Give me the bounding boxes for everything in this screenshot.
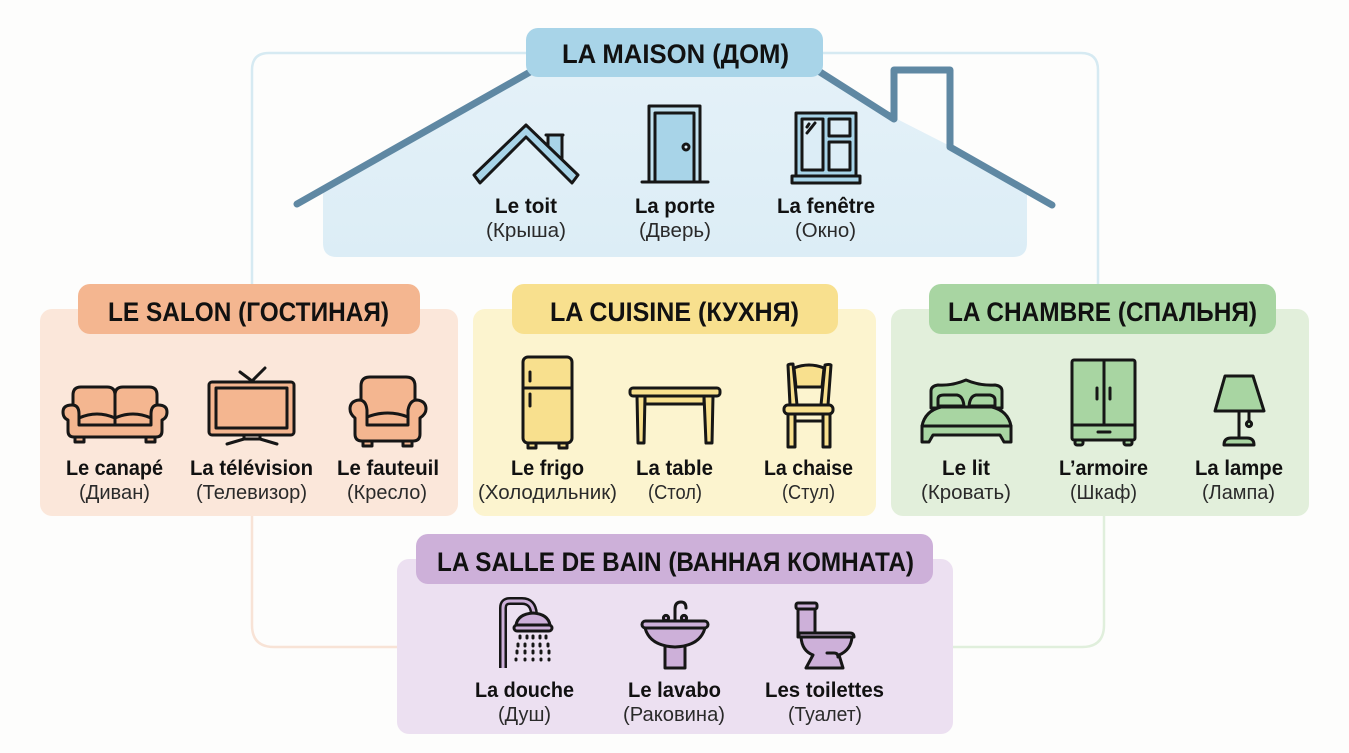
label: la porte [635, 194, 715, 242]
heading: la maison: LA MAISON (ДОМ) [562, 39, 789, 69]
label: les toilettes [765, 678, 884, 726]
icon: door [642, 106, 708, 182]
label: le canapé: Le canapé [66, 456, 163, 480]
icon: lamp [1215, 376, 1264, 445]
roof outline with chimney [297, 70, 1052, 205]
panel: la maison [297, 28, 1052, 257]
house frame outline [252, 53, 1104, 647]
label: la table: La table [636, 456, 713, 480]
label: l'armoire: L’armoire [1059, 456, 1148, 480]
label: le toit [486, 194, 566, 242]
label: le frigo [478, 456, 617, 504]
label: le canapé [66, 456, 163, 504]
label: le frigo: Le frigo [511, 456, 584, 480]
icon: bed [922, 380, 1011, 442]
icon: fridge [523, 357, 572, 448]
label: le canapé: (Диван) [79, 482, 150, 504]
icon: sink [642, 602, 708, 668]
label: la télévision: (Телевизор) [196, 482, 307, 504]
label: la lampe: (Лампа) [1202, 482, 1275, 504]
label: le lavabo [623, 678, 725, 726]
label: le lit: Le lit [942, 456, 990, 480]
label: la fenêtre [777, 194, 875, 242]
panel: la chambre [891, 284, 1309, 516]
label: le fauteuil: (Кресло) [347, 482, 427, 504]
icon: window [792, 113, 860, 183]
label: le lavabo: (Раковина) [623, 704, 725, 726]
heading: la salle de bain [416, 534, 933, 584]
icon: armchair [350, 377, 426, 446]
label: le lit [921, 456, 1011, 504]
label: le fauteuil [337, 456, 439, 504]
label: le lit: (Кровать) [921, 482, 1011, 504]
icon: chair [784, 364, 833, 447]
panel: la salle de bain [397, 534, 953, 734]
label: la table: (Стол) [648, 482, 702, 504]
icon: sofa [63, 387, 167, 442]
label: la chaise: La chaise [764, 456, 853, 480]
label: la fenêtre: La fenêtre [777, 194, 875, 218]
label: le toit: Le toit [495, 194, 557, 218]
heading: la salle de bain: LA SALLE DE BAIN (ВАННАЯ КОМНАТА) [437, 547, 914, 577]
label: le toit: (Крыша) [486, 220, 566, 242]
label: l'armoire: (Шкаф) [1070, 482, 1137, 504]
label: la lampe [1195, 456, 1283, 504]
heading: la chambre [929, 284, 1276, 334]
icon: wardrobe [1072, 360, 1135, 445]
label: la douche: La douche [475, 678, 574, 702]
label: la table [636, 456, 713, 504]
icon: television [209, 368, 294, 444]
label: la douche [475, 678, 574, 726]
panel: la cuisine [473, 284, 876, 516]
label: la lampe: La lampe [1195, 456, 1283, 480]
panel: le salon [40, 284, 458, 516]
heading: le salon: LE SALON (ГОСТИНАЯ) [108, 297, 389, 327]
icon: table [630, 388, 720, 443]
icon: shower [503, 601, 552, 668]
label: les toilettes: (Туалет) [788, 704, 862, 726]
label: la porte: La porte [635, 194, 715, 218]
label: le fauteuil: Le fauteuil [337, 456, 439, 480]
label: la chaise [764, 456, 853, 504]
heading: la chambre: LA CHAMBRE (СПАЛЬНЯ) [948, 297, 1257, 327]
heading: le salon [78, 284, 420, 334]
heading: la cuisine: LA CUISINE (КУХНЯ) [550, 297, 799, 327]
heading: la maison [526, 28, 823, 77]
icon: roof [474, 125, 578, 183]
label: l'armoire [1059, 456, 1148, 504]
icon: toilet [796, 603, 854, 668]
label: le frigo: (Холодильник) [478, 482, 617, 504]
label: le lavabo: Le lavabo [628, 678, 721, 702]
label: les toilettes: Les toilettes [765, 678, 884, 702]
label: la douche: (Душ) [498, 704, 551, 726]
label: la télévision [190, 456, 313, 504]
heading: la cuisine [512, 284, 838, 334]
house body [323, 73, 1027, 257]
label: la chaise: (Стул) [782, 482, 835, 504]
label: la porte: (Дверь) [639, 220, 711, 242]
label: la télévision: La télévision [190, 456, 313, 480]
label: la fenêtre: (Окно) [795, 220, 856, 242]
